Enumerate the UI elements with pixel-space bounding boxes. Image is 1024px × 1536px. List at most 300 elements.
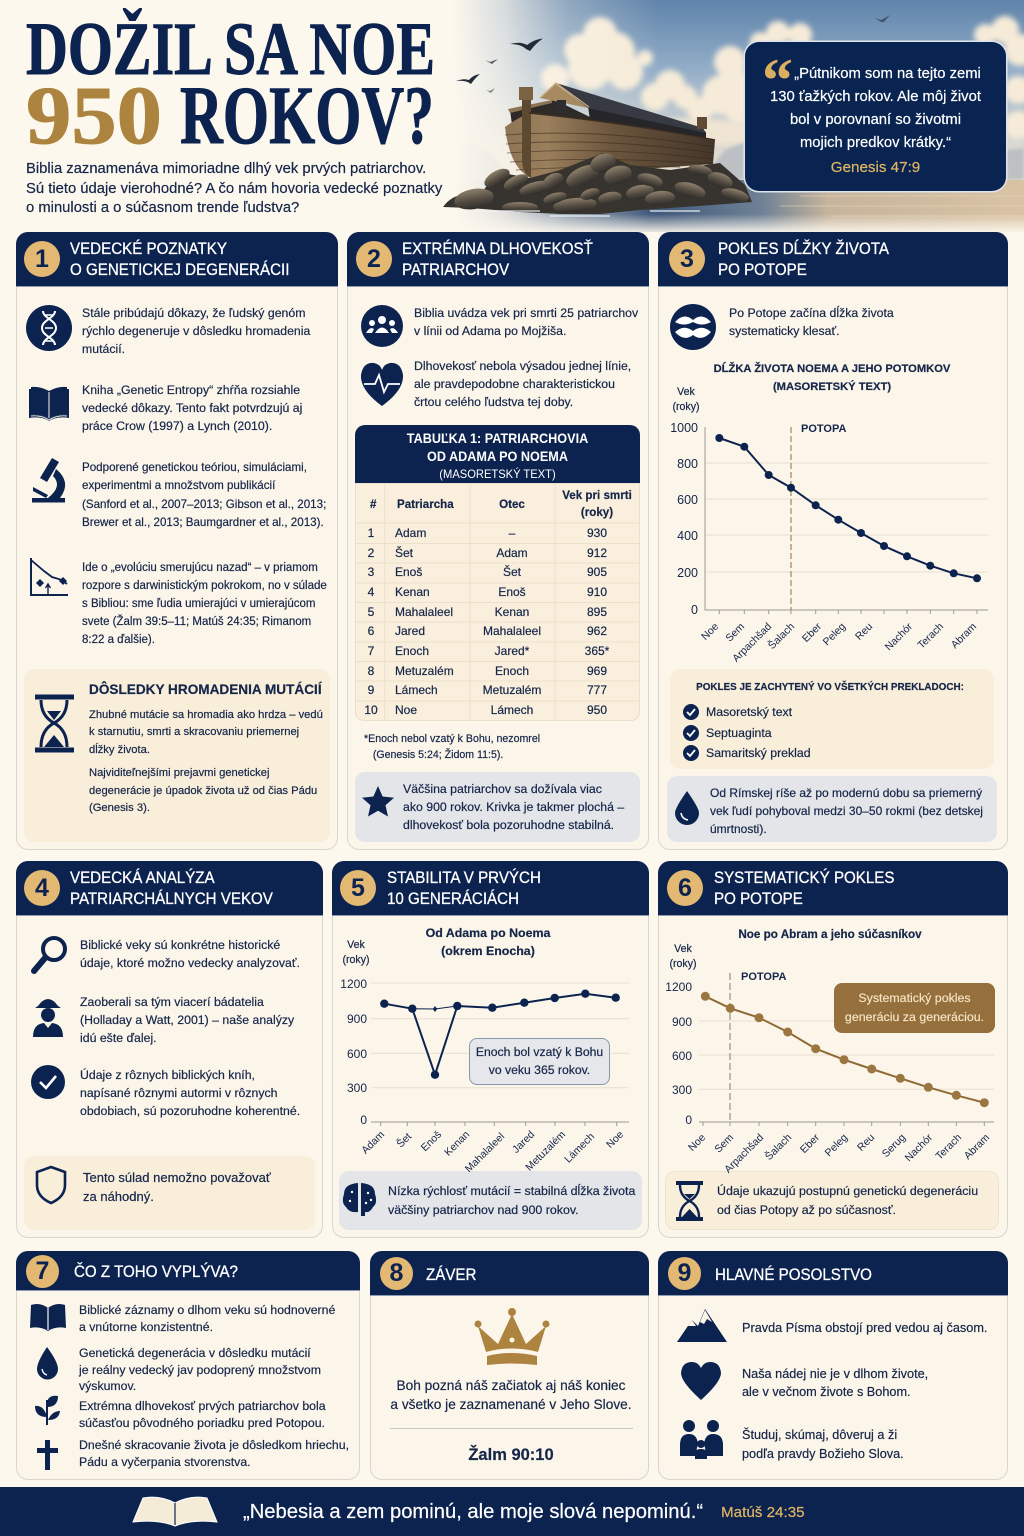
table rows: 895 [587, 605, 607, 619]
header 3: POKLES DĹŽKY ŽIVOTA [718, 239, 889, 258]
callout background: brain [339, 1171, 642, 1230]
table rows: 1 [368, 526, 374, 540]
icon: hourglass [676, 1183, 703, 1219]
line chart: Adam to Noah: 900 [347, 1012, 367, 1026]
text: simulations [82, 461, 326, 529]
list of translations [706, 705, 811, 760]
header 7: 7 [36, 1257, 49, 1285]
table rows: Mahalaleel [395, 605, 453, 619]
callout text: hourglass: od čias Potopy až po súčasnosť. [717, 1202, 896, 1216]
table rows: 910 [587, 585, 607, 599]
line chart: Noah to Abram: Abram [962, 1131, 992, 1162]
chart title: Noe po Abram a jeho súčasníkov [738, 928, 922, 941]
callout title: POKLES JE ZACHYTENÝ VO VŠETKÝCH PREKLADOCH: [696, 682, 964, 693]
birds [456, 15, 890, 93]
ark [505, 83, 715, 178]
line chart: life span of Noah and descendants: Eber [800, 620, 824, 645]
table rows: 9 [368, 683, 374, 697]
callout text: hourglass: Údaje ukazujú postupnú genetickú degeneráciu [717, 1184, 978, 1198]
callout text: degenerácie je úpadok života už od čias Pádu [89, 785, 317, 797]
axis label: (roky) [669, 958, 697, 970]
table rows: Kenan [495, 605, 529, 619]
chart title: (okrem Enocha) [441, 944, 535, 958]
quote text: „Pútnikom som na tejto zemi [794, 66, 981, 82]
intro text: Sú tieto údaje vierohodné? A čo nám hovoria vedecké poznatky [26, 180, 442, 196]
panel 8: conclusion [370, 1251, 649, 1480]
icon: shield [37, 1167, 65, 1203]
table rows: 4 [368, 585, 374, 599]
line chart: life span of Noah and descendants: 600 [677, 493, 698, 507]
table rows: 930 [587, 526, 607, 540]
table rows: 905 [587, 565, 607, 579]
text: researchers: idú ešte ďalej. [80, 1031, 157, 1045]
icon: hourglass [35, 697, 74, 750]
text: researchers: Zaoberali sa tým viacerí bádatelia [80, 995, 264, 1009]
text: after the flood: Po Potope začína dĺžka života [729, 306, 894, 320]
item: degeneration [78, 1346, 321, 1393]
message: study: podľa pravdy Božieho Slova. [742, 1447, 904, 1461]
header 2: PATRIARCHOV [402, 260, 509, 279]
scripture reference: Žalm 90:10 [468, 1446, 554, 1464]
callout background: mutations [24, 669, 330, 842]
line chart: life span of Noah and descendants: Arpachšad [730, 621, 774, 665]
item: degeneration: je reálny vedecký jav podoprený množstvom [79, 1362, 321, 1376]
message: truth: Pravda Písma obstojí pred vedou aj časom. [742, 1321, 987, 1335]
line chart: life span of Noah and descendants: Reu [853, 621, 875, 643]
chart title: DĹŽKA ŽIVOTA NOEMA A JEHO POTOMKOV [714, 363, 950, 375]
table rows: Adam [496, 546, 528, 560]
text: simulations: experimentmi a množstvom publikácií [82, 479, 275, 492]
line chart: life span of Noah and descendants [670, 421, 988, 665]
quote box [745, 42, 1006, 191]
header 6: SYSTEMATICKÝ POKLES [714, 868, 894, 887]
callout text: shield [83, 1170, 271, 1204]
table rows: 777 [587, 683, 607, 697]
callout text: Zhubné mutácie sa hromadia ako hrdza – vedú [89, 709, 323, 721]
text: 25 patriarchs: Biblia uvádza vek pri smrti 25 patriarchov [414, 306, 638, 320]
table rows: Metuzalém [395, 664, 454, 678]
intro text [26, 161, 442, 216]
line chart: Noah to Abram [665, 971, 994, 1176]
line chart: life span of Noah and descendants: Peleg [821, 621, 848, 648]
header 1: 1 [35, 245, 49, 273]
line chart: life span of Noah and descendants: Šalach [765, 620, 797, 652]
table rows: 962 [587, 624, 607, 638]
item: records: Biblické záznamy o dlhom veku sú hodnoverné [79, 1303, 335, 1317]
line chart: life span of Noah and descendants: Sem [723, 620, 747, 644]
text: Genetic Entropy [82, 383, 302, 433]
footer quote: „Nebesia a zem pominú, ale moje slová nepominú.“ [243, 1501, 703, 1523]
line chart: Noah to Abram: Peleg [823, 1132, 850, 1159]
icon: DNA [26, 305, 72, 351]
icon: leaves [35, 1396, 60, 1425]
panel 2: extreme longevity [347, 232, 649, 850]
axis label: Vek [677, 386, 695, 398]
quote mark: “ [762, 47, 793, 115]
line chart: Noah to Abram: Nachór [903, 1131, 935, 1164]
callout text: Roman: Od Rímskej ríše až po modernú dobu sa priemerný [710, 786, 982, 800]
text: evolution backwards: rozpore s darwinistickým pokrokom, no v súlade [82, 580, 327, 592]
callout: Enoch: vo veku 365 rokov. [489, 1062, 590, 1076]
text: concrete data: údaje, ktoré možno vedecky analyzovať. [80, 956, 300, 970]
callout text: star: ako 900 rokov. Krivka je takmer plochá – [403, 800, 624, 814]
icon: family [680, 1420, 723, 1459]
callout text: k starnutiu, smrti a skracovaniu priemernej [89, 726, 299, 738]
footer band [0, 1487, 1024, 1536]
line chart: Noah to Abram: 600 [672, 1049, 692, 1063]
table rows: Jared* [495, 644, 529, 658]
header 5: 10 GENERÁCIÁCH [387, 889, 519, 908]
table rows: Enoch [395, 644, 429, 658]
text: coherent: obdobiach, sú pozoruhodne koherentné. [80, 1104, 300, 1118]
icon: researcher [33, 999, 63, 1037]
line chart: Adam to Noah: Noe [604, 1129, 626, 1151]
text: Genetic Entropy: Kniha „Genetic Entropy“ zhŕňa rozsiahle [82, 383, 300, 397]
table rows: Šet [395, 546, 413, 560]
header 9: 9 [678, 1259, 691, 1287]
text: genome [82, 306, 310, 356]
line chart: life span of Noah and descendants: POTOPA [801, 423, 846, 435]
callout text: brain: Nízka rýchlosť mutácií = stabilná dĺžka života [388, 1184, 635, 1198]
callout text: Roman: úmrtnosti). [710, 822, 767, 836]
line chart: life span of Noah and descendants: 1000 [670, 421, 698, 435]
icon: check circle [31, 1065, 65, 1099]
callout: systematic decline [834, 983, 995, 1033]
callout: Enoch [469, 1038, 610, 1084]
callout title: DÔSLEDKY HROMADENIA MUTÁCIÍ [89, 682, 322, 697]
table column headings: (roky) [581, 506, 613, 519]
header 5 [332, 861, 649, 916]
panel 5: stability [332, 861, 649, 1238]
line chart: Adam to Noah: Mahalaleel [463, 1131, 507, 1175]
line chart: Noah to Abram: Eber [798, 1131, 822, 1156]
header 4 [16, 861, 323, 916]
list of translations: Samaritský preklad [706, 746, 811, 760]
header 5: 5 [351, 874, 365, 902]
text: concrete data: Biblické veky sú konkrétne historické [80, 938, 280, 952]
line chart: life span of Noah and descendants: Nachór [883, 620, 915, 653]
line chart: Noah to Abram: Terach [933, 1132, 964, 1162]
item: longevity: Extrémna dlhovekosť prvých patriarchov bola [79, 1399, 326, 1413]
axis label: (roky) [672, 400, 700, 412]
line chart: life span of Noah and descendants: Noe [699, 621, 721, 643]
line chart: Noah to Abram: 900 [672, 1015, 692, 1029]
icon: heart with pulse [361, 363, 403, 406]
table column headings: Patriarcha [397, 498, 454, 511]
item: degeneration: výskumov. [79, 1379, 136, 1393]
table rows: 950 [587, 703, 607, 717]
icon: declining chart [31, 558, 68, 595]
line chart: life span of Noah and descendants: 800 [677, 457, 698, 471]
header 4: 4 [35, 874, 49, 902]
line chart: Noah to Abram: Sem [712, 1131, 736, 1155]
rocks [443, 150, 752, 216]
text: genome: rýchlo degeneruje v dôsledku hromadenia [82, 324, 310, 338]
text: researchers [80, 995, 294, 1045]
callout background: hourglass [665, 1171, 999, 1230]
icon: microscope [32, 458, 65, 502]
header 7: ČO Z TOHO VYPLÝVA? [74, 1262, 238, 1281]
header 4: PATRIARCHÁLNYCH VEKOV [70, 889, 273, 908]
text: genome: Stále pribúdajú dôkazy, že ľudský genóm [82, 306, 305, 320]
table rows: 912 [587, 546, 607, 560]
table rows: Lámech [491, 703, 533, 717]
icon: people [361, 305, 403, 347]
callout: systematic decline: Systematický pokles [858, 991, 971, 1005]
message: study [742, 1427, 904, 1461]
header 7 [16, 1251, 360, 1291]
callout background: star [355, 772, 640, 842]
item: shortening [79, 1438, 349, 1469]
panel 4: scientific analysis [16, 861, 323, 1238]
line chart: Adam to Noah [340, 977, 629, 1175]
chart title [714, 362, 950, 393]
table rows: 2 [368, 546, 374, 560]
table grid [355, 483, 640, 721]
callout text: brain: väčšiny patriarchov nad 900 rokov. [388, 1202, 579, 1216]
intro text: Biblia zaznamenáva mimoriadne dlhý vek prvých patriarchov. [26, 161, 426, 177]
table rows: Adam [395, 526, 426, 540]
message: study: Študuj, skúmaj, dôveruj a ži [742, 1428, 897, 1442]
table footnote: (Genesis 5:24; Židom 11:5). [373, 749, 503, 761]
header 9 [658, 1251, 1008, 1296]
table header: (MASORETSKÝ TEXT) [439, 467, 556, 481]
table footnote [364, 733, 540, 761]
icon: drop [675, 791, 699, 825]
quote text: bol v porovnaní so životmi [790, 112, 961, 128]
text: 25 patriarchs [414, 306, 638, 338]
header 8: 8 [390, 1259, 403, 1287]
check marks [683, 704, 699, 761]
line chart: Noah to Abram: 0 [685, 1113, 692, 1127]
text: evolution backwards: s Bibliou: sme ľudia umierajúci v umierajúcom [82, 598, 315, 610]
text: simulations: (Sanford et al., 2007–2013; Gibson et al., 2013; [82, 498, 326, 511]
list of translations: Masoretský text [706, 705, 792, 719]
axis label: Vek [347, 939, 365, 951]
table rows: Enoš [498, 585, 526, 599]
icon: heart [681, 1362, 721, 1400]
axis label [672, 386, 700, 413]
axis label [342, 939, 370, 966]
table rows: 6 [368, 624, 374, 638]
table rows: Metuzalém [483, 683, 541, 697]
text: coherent: napísané rôznymi autormi v rôznych [80, 1086, 278, 1100]
header 6: PO POTOPE [714, 889, 803, 908]
line chart: life span of Noah and descendants: 200 [677, 566, 698, 580]
quote text: mojich predkov krátky.“ [800, 135, 951, 151]
divider [390, 1428, 633, 1429]
line chart: Adam to Noah: 600 [347, 1047, 367, 1061]
callout text: star: Väčšina patriarchov sa dožívala viac [403, 782, 602, 796]
icon: waves [670, 304, 716, 350]
table rows: – [509, 526, 515, 540]
callout text: hourglass [717, 1184, 978, 1217]
header 8 [370, 1251, 649, 1296]
line chart: Adam to Noah: 1200 [340, 977, 367, 991]
list of translations: Septuaginta [706, 726, 772, 740]
text: evolution backwards: svete (Žalm 39:5–11; Matúš 24:35; Rimanom [82, 616, 311, 628]
line chart: Adam to Noah: Metuzalém [523, 1128, 568, 1173]
table footnote: *Enoch nebol vzatý k Bohu, nezomrel [364, 733, 540, 745]
table rows: Šet [503, 565, 521, 579]
text: concrete data [80, 938, 300, 970]
callout: Enoch: Enoch bol vzatý k Bohu [476, 1045, 603, 1059]
title [26, 8, 435, 156]
icon: book [30, 1304, 66, 1331]
line chart: life span of Noah and descendants: 400 [677, 529, 698, 543]
header 9: HLAVNÉ POSOLSTVO [715, 1265, 872, 1284]
header 3 [658, 232, 1008, 287]
text: after the flood: systematicky klesať. [729, 324, 840, 338]
text: 25 patriarchs: v línii od Adama po Mojžiša. [414, 324, 566, 338]
callout text: star: dlhovekosť bola pozoruhodne stabilná. [403, 818, 614, 832]
text: coherent [80, 1068, 300, 1118]
text: coherent: Údaje z rôznych biblických kníh, [80, 1068, 255, 1082]
axis label: (roky) [342, 954, 370, 966]
text: Genetic Entropy: vedecké dôkazy. Tento fakt potvrdzujú aj [82, 401, 302, 415]
callout: systematic decline: generáciu za generáciou. [845, 1010, 984, 1024]
table rows: Enoch [495, 664, 529, 678]
axis label [669, 943, 697, 970]
quote text [770, 66, 981, 151]
table rows: Jared [395, 624, 425, 638]
text: after the flood [729, 306, 894, 338]
message: hope: Naša nádej nie je v dlhom živote, [742, 1367, 928, 1381]
icon: crown [474, 1308, 550, 1365]
line chart: Noah to Abram: Arpachšad [722, 1132, 766, 1176]
callout text: dĺžky života. [89, 744, 150, 756]
header 1 [16, 232, 338, 287]
table rows: 7 [368, 644, 374, 658]
header 2: 2 [367, 245, 381, 273]
text: longevity: Dlhovekosť nebola výsadou jednej línie, [414, 359, 631, 373]
chart title: (MASORETSKÝ TEXT) [773, 381, 891, 393]
text: longevity: ale pravdepodobne charakteristickou [414, 377, 615, 391]
callout background: shield [24, 1156, 315, 1230]
message: hope [742, 1367, 928, 1399]
text: Genetic Entropy: práce Crow (1997) a Lynch (2010). [82, 419, 272, 433]
chart title: Od Adama po Noema [426, 926, 550, 940]
callout text: Roman: vek ľudí pohyboval medzi 30–50 rokmi (bez detskej [710, 804, 983, 818]
callout text: shield: za náhodný. [83, 1189, 154, 1204]
table column headings: Otec [499, 498, 525, 511]
table rows: Kenan [395, 585, 430, 599]
conclusion text [390, 1378, 632, 1412]
header 2 [347, 232, 649, 287]
callout background: Roman [667, 776, 997, 842]
intro text: o minulosti a o súčasnom trende ľudstva? [26, 200, 299, 216]
table rows: Enoš [395, 565, 422, 579]
icon: mountains [677, 1309, 727, 1342]
callout text: Najviditeľnejšími prejavmi genetickej [89, 767, 269, 779]
table rows: 969 [587, 664, 607, 678]
table header: TABUĽKA 1: PATRIARCHOVIA [407, 431, 588, 446]
line chart: Adam to Noah: Jared [510, 1129, 537, 1156]
table rows [364, 526, 610, 717]
header 2: EXTRÉMNA DLHOVEKOSŤ [402, 239, 593, 258]
callout text: star [403, 782, 624, 832]
line chart: Noah to Abram: 1200 [665, 980, 692, 994]
table column headings: # [370, 498, 376, 511]
text: genome: mutácií. [82, 342, 125, 356]
callout text: Roman [710, 786, 983, 836]
table rows: 8 [368, 664, 374, 678]
panel 9: main message [658, 1251, 1008, 1480]
table column headings: Vek pri smrti [562, 489, 632, 502]
table header: OD ADAMA PO NOEMA [427, 448, 568, 464]
table rows: Noe [395, 703, 417, 717]
axis label: Vek [674, 943, 692, 955]
conclusion text: a všetko je zaznamenané v Jeho Slove. [390, 1397, 632, 1412]
callout background: translations [670, 669, 994, 769]
line chart: Noah to Abram: Noe [686, 1132, 708, 1154]
header 3: PO POTOPE [718, 260, 807, 279]
line chart: life span of Noah and descendants: Abram [949, 620, 979, 651]
icon: cross [37, 1440, 58, 1470]
icon: book [29, 387, 69, 421]
text: longevity: črtou celého ľudstva tej doby. [414, 395, 573, 409]
item: degeneration: Genetická degenerácia v dôsledku mutácií [79, 1346, 311, 1360]
header 1: O GENETICKEJ DEGENERÁCII [70, 260, 289, 279]
item: shortening: Pádu a vyčerpania stvorenstva. [79, 1454, 251, 1468]
line chart: Noah to Abram: 300 [672, 1083, 692, 1097]
table column headings [370, 489, 632, 519]
line chart: Adam to Noah: 300 [347, 1081, 367, 1095]
table rows: 365* [585, 644, 609, 658]
line chart: Adam to Noah: Enoš [419, 1129, 444, 1154]
hero illustration: ark on rocks at sea [443, 0, 1024, 232]
panel 3: decline after flood [658, 232, 1008, 850]
item: longevity: súčasťou pôvodného poriadku pred Potopou. [79, 1416, 325, 1430]
line chart: Adam to Noah: Šet [394, 1130, 414, 1150]
icon: drop [37, 1347, 58, 1379]
line chart: Adam to Noah: Lámech [562, 1131, 597, 1166]
table rows: Lámech [395, 683, 438, 697]
text: researchers: (Holladay a Watt, 2001) – naše analýzy [80, 1013, 294, 1027]
quote reference: Genesis 47:9 [831, 159, 920, 176]
table rows: Mahalaleel [483, 624, 541, 638]
line chart: Noah to Abram: Reu [855, 1132, 877, 1154]
text: simulations: Podporené genetickou teóriou, simuláciami, [82, 461, 307, 474]
text: simulations: Brewer et al., 2013; Baumgardner et al., 2013). [82, 516, 324, 529]
item: shortening: Dnešné skracovanie života je dôsledkom hriechu, [79, 1438, 349, 1452]
table header [355, 425, 640, 483]
icon: brain [343, 1183, 376, 1216]
callout text: shield: Tento súlad nemožno považovať [83, 1170, 271, 1185]
header 1: VEDECKÉ POZNATKY [70, 239, 227, 258]
header 6: 6 [678, 874, 692, 902]
text: evolution backwards [82, 562, 327, 646]
header 3: 3 [680, 245, 694, 273]
header 8: ZÁVER [426, 1265, 476, 1284]
table rows: 3 [368, 565, 374, 579]
panel 1: genetic degeneration [16, 232, 338, 850]
header 4: VEDECKÁ ANALÝZA [70, 868, 215, 887]
icon: magnifier [34, 938, 65, 971]
table rows: 5 [368, 605, 374, 619]
line chart: life span of Noah and descendants: 0 [691, 603, 698, 617]
callout text [89, 709, 323, 814]
header 6 [658, 861, 1008, 916]
icon: star [362, 786, 394, 816]
line chart: Adam to Noah: 0 [360, 1113, 367, 1127]
panel 7: what follows [16, 1251, 360, 1480]
conclusion text: Boh pozná náš začiatok aj náš koniec [396, 1378, 626, 1393]
item: records: a vnútorne konzistentné. [79, 1320, 213, 1334]
item: records [79, 1303, 335, 1334]
item: longevity [79, 1399, 326, 1430]
message: hope: ale v večnom živote s Bohom. [742, 1385, 911, 1399]
